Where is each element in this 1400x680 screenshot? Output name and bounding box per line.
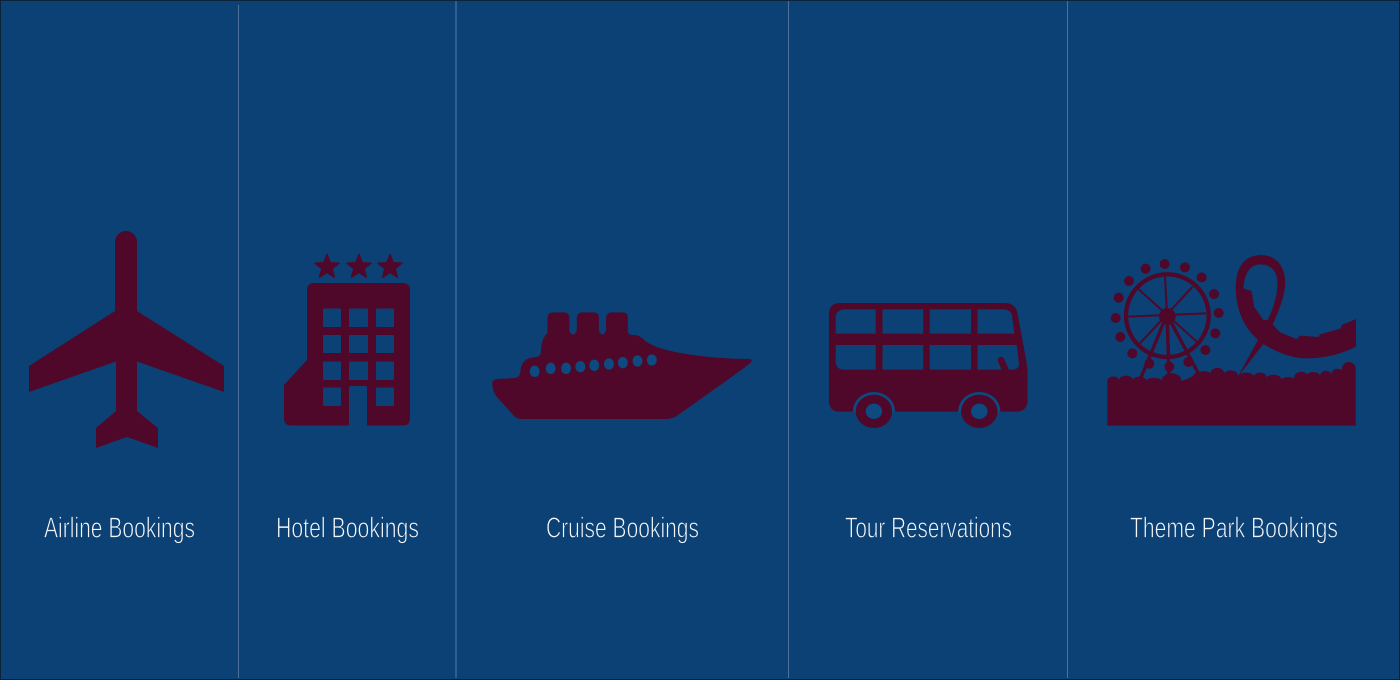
panel: hotel bookings — [276, 254, 419, 544]
icon: airplane — [29, 231, 224, 448]
label: tour reservations: Tour Reservations — [845, 512, 1012, 544]
icon: ferris wheel and roller coaster — [1107, 255, 1356, 426]
label: cruise bookings: Cruise Bookings — [546, 512, 699, 544]
label: hotel bookings: Hotel Bookings — [276, 512, 419, 544]
icon: hotel building with three stars — [284, 254, 410, 426]
icon: double-decker bus — [829, 303, 1028, 432]
label: airline bookings: Airline Bookings — [44, 512, 195, 544]
panel: tour reservations — [829, 303, 1028, 544]
panel: airline bookings — [29, 231, 224, 544]
panel: cruise bookings — [492, 312, 752, 544]
icon: cruise ship — [492, 312, 752, 419]
panel: theme park bookings — [1107, 255, 1356, 545]
